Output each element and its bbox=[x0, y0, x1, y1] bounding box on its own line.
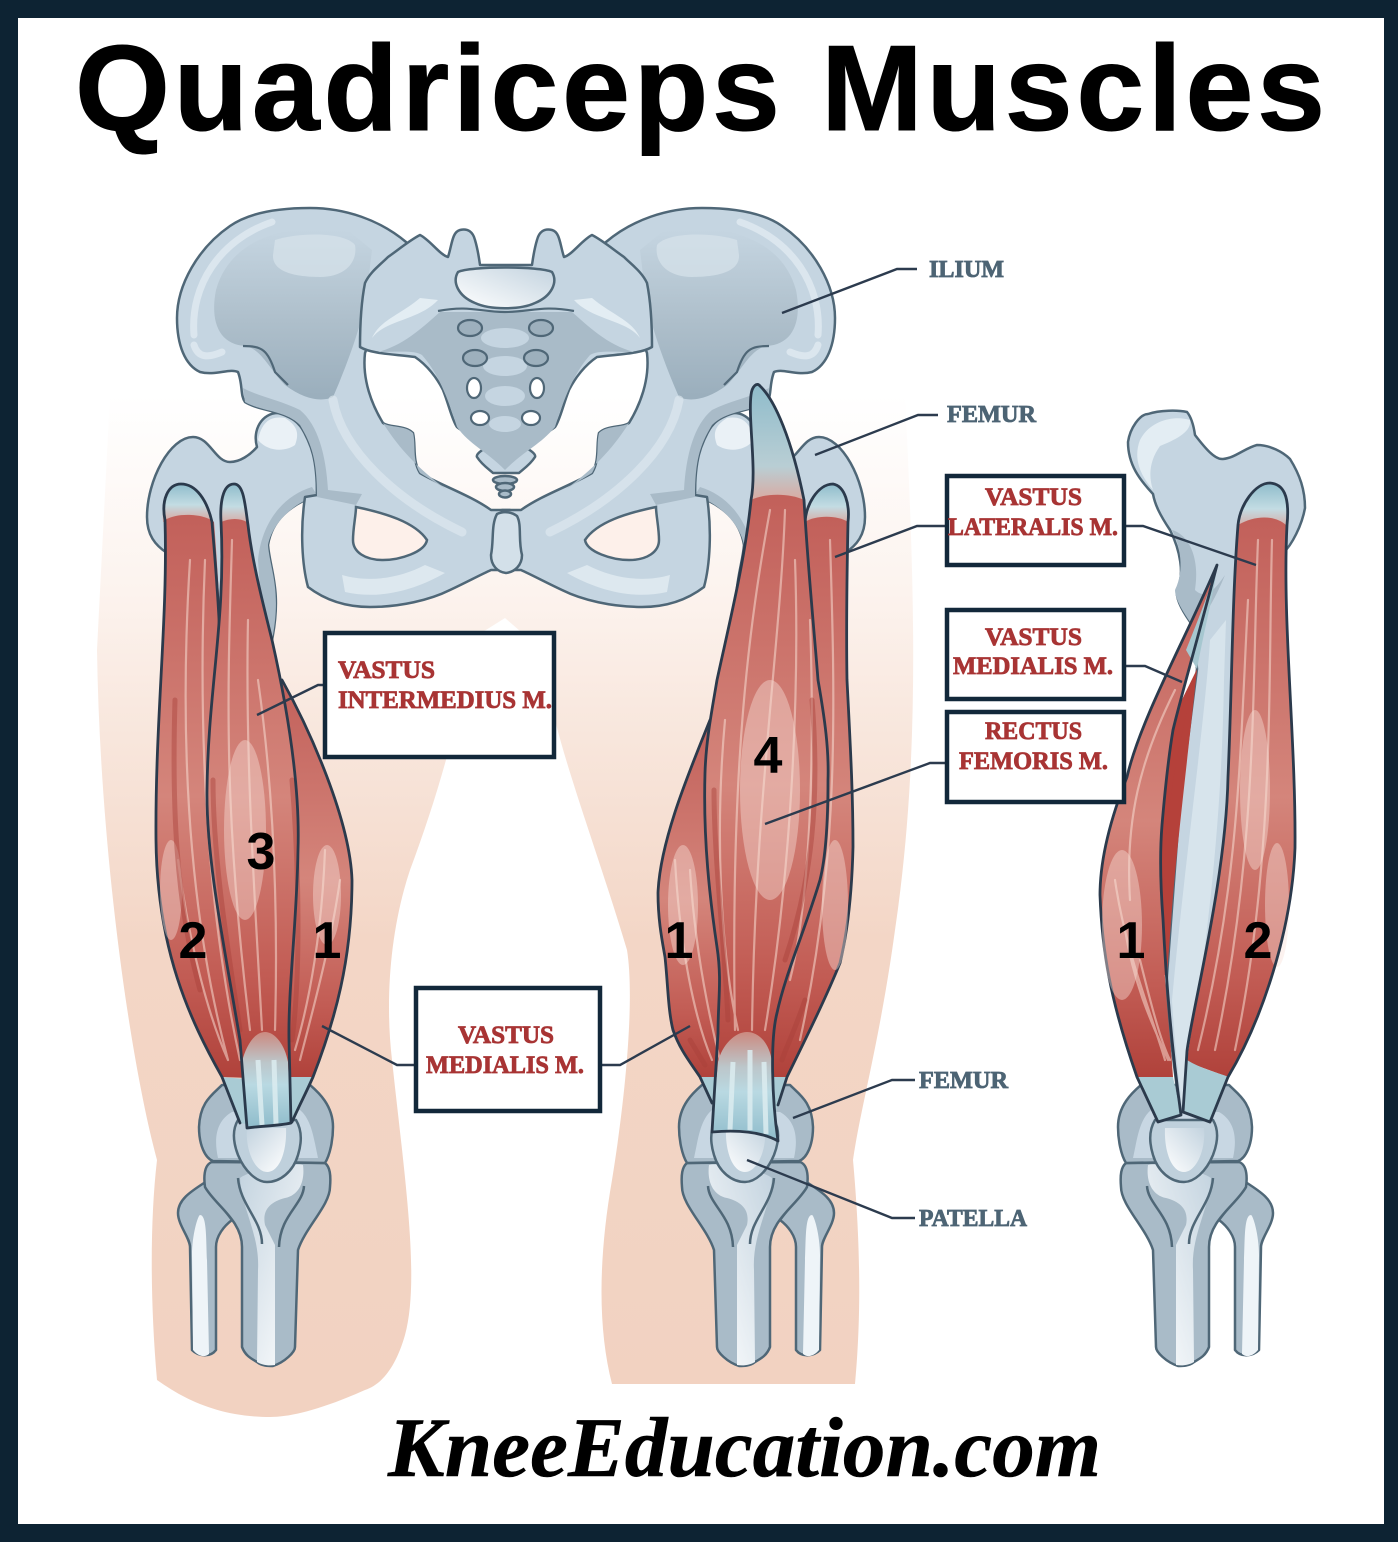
callout: vastus lateralis bbox=[947, 476, 1124, 565]
vastus medialis lower tendon, left leg bbox=[285, 1077, 313, 1122]
middle leg: anterior superficial view bbox=[658, 384, 853, 1366]
left leg: anterior deep view bbox=[156, 484, 352, 1366]
rectus upper stump, left leg bbox=[221, 484, 248, 525]
coccyx bbox=[493, 476, 517, 498]
knee and lower leg bones bbox=[679, 1085, 834, 1366]
leader line: vastus medialis, left leg bbox=[322, 1026, 415, 1065]
label: femur upper: FEMUR bbox=[947, 402, 1037, 428]
muscle highlights and fibres, middle leg bbox=[668, 510, 848, 1065]
vastus lateralis outline, right leg bbox=[1183, 483, 1295, 1122]
label: femur lower: FEMUR bbox=[919, 1068, 1009, 1094]
vastus lateralis muscle, middle leg bbox=[760, 517, 853, 1077]
callout: vastus medialis, right: MEDIALIS M. bbox=[953, 653, 1113, 680]
rectus femoris muscle, middle leg bbox=[705, 495, 828, 1075]
vastus lateralis outline, middle leg bbox=[778, 484, 853, 1105]
callout: vastus lateralis: LATERALIS M. bbox=[948, 514, 1118, 541]
leader line: vastus medialis, right leg bbox=[1125, 666, 1182, 682]
vastus medialis muscle, right leg bbox=[1100, 565, 1217, 1077]
femoral neck shading bbox=[1172, 530, 1225, 626]
leader line: femur lower bbox=[793, 1080, 915, 1118]
pelvis illustration bbox=[147, 208, 865, 640]
right hip bone and femur head bbox=[502, 208, 865, 640]
number 1, middle leg: 1 bbox=[665, 912, 693, 970]
leader line: rectus femoris bbox=[765, 763, 946, 824]
number 1, left leg: 1 bbox=[313, 912, 341, 970]
muscle highlights and fibres, right leg bbox=[1102, 540, 1289, 1060]
femoral tendon tip bbox=[1186, 565, 1217, 669]
callout: vastus medialis, centre: VASTUS bbox=[458, 1022, 554, 1049]
vastus lateralis muscle, left leg bbox=[156, 515, 250, 1078]
number 2, left leg: 2 bbox=[179, 912, 207, 970]
leader line: vastus lateralis, right leg bbox=[1125, 526, 1256, 565]
leader line: vastus medialis, middle leg bbox=[600, 1026, 690, 1065]
vastus medialis muscle, left leg bbox=[270, 680, 352, 1077]
vastus lateralis upper tendon, right leg bbox=[1239, 483, 1288, 530]
vastus medialis outline, right leg bbox=[1100, 565, 1217, 1122]
number 3, left leg: 3 bbox=[247, 823, 275, 881]
callout: vastus intermedius: INTERMEDIUS M. bbox=[338, 687, 552, 714]
leader line: vastus lateralis, middle leg bbox=[835, 526, 946, 557]
vastus lateralis upper tendon, left leg bbox=[163, 484, 212, 522]
callout: rectus femoris bbox=[947, 712, 1124, 802]
left hip bone and femur head bbox=[147, 208, 510, 640]
rectus femoris upper tendon, middle leg bbox=[750, 384, 805, 502]
muscle highlights and fibres, left leg bbox=[160, 540, 341, 1060]
callout: vastus medialis, centre: MEDIALIS M. bbox=[426, 1052, 584, 1079]
vastus medialis muscle, middle leg bbox=[658, 720, 740, 1077]
knee and lower leg bones bbox=[178, 1085, 333, 1366]
leader line: patella bbox=[747, 1160, 915, 1218]
callout: rectus femoris: FEMORIS M. bbox=[959, 748, 1108, 775]
vastus lateralis lower tendon, right leg bbox=[1183, 1060, 1229, 1122]
callout: rectus femoris: RECTUS bbox=[985, 718, 1082, 745]
callout: vastus lateralis: VASTUS bbox=[985, 484, 1082, 511]
title: Quadriceps Muscles bbox=[75, 20, 1325, 156]
callout: vastus medialis, right: VASTUS bbox=[985, 624, 1082, 651]
rectus lower tendon, left leg bbox=[242, 1032, 291, 1128]
vastus medialis outline, left leg bbox=[282, 680, 352, 1122]
callout: vastus intermedius bbox=[325, 633, 554, 757]
dark inner muscle strip lower bbox=[1164, 669, 1197, 975]
vastus lateralis lower tendon, middle leg bbox=[765, 1077, 787, 1124]
sacral foramina bbox=[458, 320, 553, 425]
vastus medialis lower tendon, middle leg bbox=[700, 1077, 725, 1124]
vastus medialis outline, middle leg bbox=[658, 720, 712, 1103]
tendon stripes, middle leg bbox=[730, 1050, 766, 1134]
panel: skin silhouette of thighs bbox=[97, 395, 913, 1417]
number 4, middle leg: 4 bbox=[754, 727, 783, 785]
tendon stripes, left leg bbox=[258, 1060, 276, 1125]
vastus lateralis upper tendon, middle leg bbox=[803, 484, 848, 525]
dark inner muscle strip bbox=[1155, 669, 1197, 975]
knee and lower leg bones bbox=[1118, 1085, 1273, 1366]
femur shaft light band bbox=[1172, 620, 1226, 1105]
femur head and shaft bbox=[1128, 411, 1305, 1112]
vastus lateralis outline, left leg bbox=[156, 484, 240, 1123]
rectus femoris outline, middle leg bbox=[705, 384, 828, 1141]
vastus intermedius outline, left leg bbox=[207, 484, 298, 1128]
label: ilium: ILIUM bbox=[929, 257, 1004, 283]
sacral disk bbox=[456, 268, 554, 308]
vastus lateralis muscle, right leg bbox=[1187, 518, 1295, 1077]
number 2, right leg: 2 bbox=[1244, 912, 1272, 970]
rectus femoris lower tendon, middle leg bbox=[712, 1032, 778, 1141]
vastus lateralis lower tendon, left leg bbox=[221, 1077, 246, 1124]
leader line: vastus intermedius bbox=[257, 685, 332, 715]
label: patella: PATELLA bbox=[919, 1206, 1028, 1232]
callout: vastus medialis, centre bbox=[416, 988, 600, 1111]
sacrum bbox=[360, 229, 652, 473]
vastus medialis lower tendon, right leg bbox=[1137, 1077, 1181, 1122]
leader line: femur upper bbox=[815, 415, 938, 455]
right leg: lateral view bbox=[1100, 411, 1305, 1366]
vastus intermedius muscle, left leg bbox=[207, 519, 298, 1075]
callout: vastus intermedius: VASTUS bbox=[338, 657, 435, 684]
website footer: KneeEducation.com bbox=[387, 1401, 1101, 1495]
pubic symphysis bbox=[491, 512, 522, 573]
leader line: ilium bbox=[782, 269, 917, 313]
femoral head highlight bbox=[1137, 418, 1190, 490]
callout: vastus medialis, right bbox=[947, 610, 1124, 699]
number 1, right leg: 1 bbox=[1117, 912, 1145, 970]
